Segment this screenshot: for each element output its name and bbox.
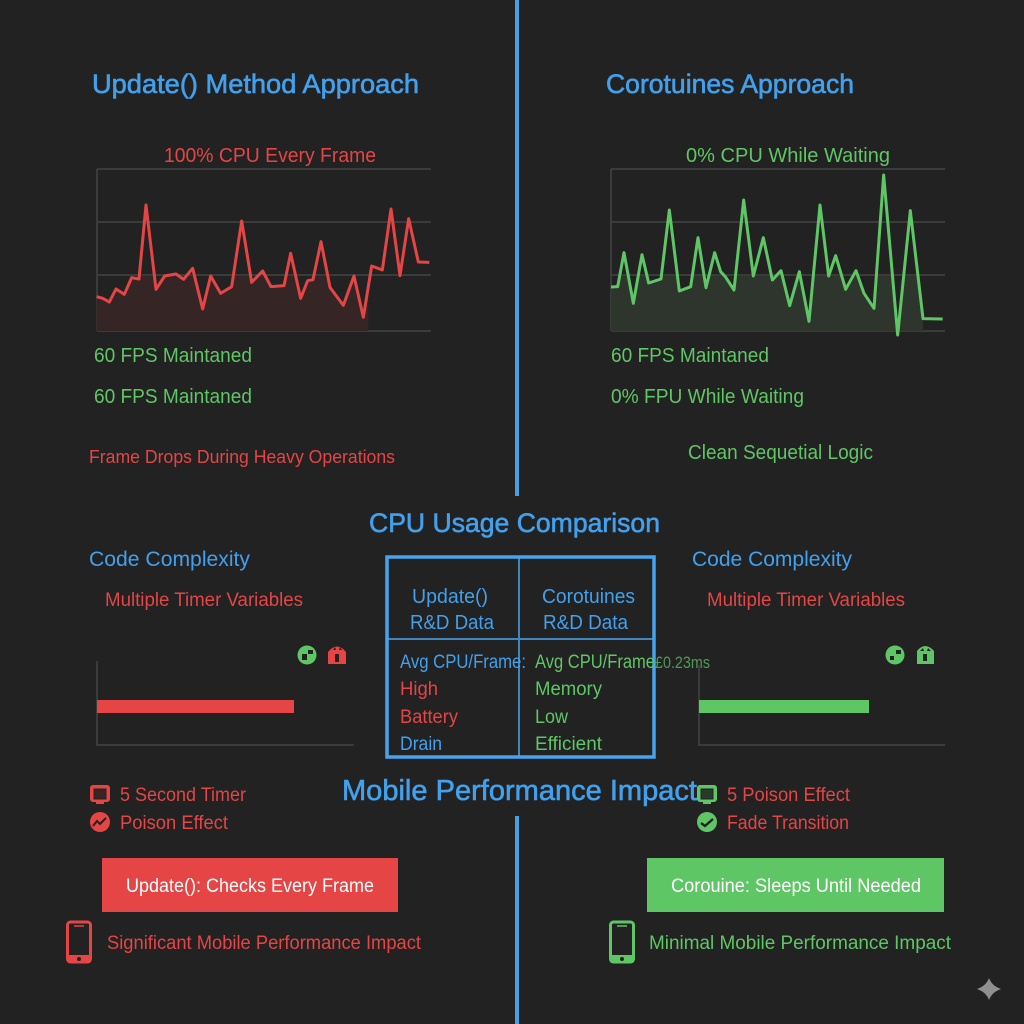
list item: poison: Poison Effect xyxy=(120,813,229,834)
note: clean logic: Clean Sequetial Logic xyxy=(688,442,873,464)
chart caption: update: 100% CPU Every Frame xyxy=(164,145,376,167)
list item: timer: 5 Second Timer xyxy=(120,785,247,806)
subheading: timer variables: Multiple Timer Variables xyxy=(105,590,303,611)
button: coroutine sleeps: Corouine: Sleeps Until Needed xyxy=(671,876,921,897)
column values: update: Drain xyxy=(400,734,442,755)
button: update checks: Update(): Checks Every Frame xyxy=(126,876,374,897)
column values: coroutines: Low xyxy=(535,707,568,728)
column header: coroutines xyxy=(542,586,635,634)
column values: update: Battery xyxy=(400,707,458,728)
column values: update xyxy=(400,652,526,755)
chart caption: coroutines: 0% CPU While Waiting xyxy=(686,145,890,167)
bar chart: coroutines complexity xyxy=(699,665,945,745)
heading: code complexity: Code Complexity xyxy=(89,548,250,571)
button: coroutine sleeps xyxy=(647,858,944,912)
list item: poison effect: 5 Poison Effect xyxy=(727,785,851,806)
subheading: timer variables: Multiple Timer Variables xyxy=(707,590,905,611)
stat: fpu while waiting: 0% FPU While Waiting xyxy=(611,386,804,408)
panel: code complexity update xyxy=(89,548,354,834)
icon: green lock xyxy=(917,646,934,664)
button: update checks xyxy=(102,858,398,912)
panel: update mobile impact xyxy=(67,858,422,963)
table grid xyxy=(387,557,654,757)
icon: green badge xyxy=(298,646,316,664)
icon: red lock xyxy=(328,646,346,664)
panel: comparison table xyxy=(387,557,710,757)
icon: green badge xyxy=(886,646,904,664)
panel: code complexity coroutines xyxy=(692,548,945,834)
panel: coroutines approach xyxy=(606,69,945,464)
text: minimal impact: Minimal Mobile Performance Impact xyxy=(649,933,952,954)
bar chart: update complexity xyxy=(97,661,354,745)
table border xyxy=(387,557,654,757)
line chart: update CPU xyxy=(97,169,431,331)
stat: fps: 60 FPS Maintaned xyxy=(94,345,252,367)
center divider bottom xyxy=(515,816,519,1024)
center divider top xyxy=(515,0,519,496)
column header: update xyxy=(410,586,495,634)
heading: code complexity: Code Complexity xyxy=(692,548,852,571)
heading: cpu usage comparison: CPU Usage Comparison xyxy=(369,508,660,538)
text: significant impact: Significant Mobile Performance Impact xyxy=(107,933,422,954)
heading: update approach: Update() Method Approach xyxy=(92,69,419,99)
icon: sparkle xyxy=(977,978,1001,1000)
column values: coroutines xyxy=(535,652,710,755)
column values: update: Avg CPU/Frame: xyxy=(400,652,526,673)
column header: coroutines: R&D Data xyxy=(543,612,629,634)
column values: coroutines: Memory xyxy=(535,679,602,700)
stat: fps: 60 FPS Maintaned xyxy=(611,345,769,367)
column values: coroutines: £0.23ms xyxy=(655,653,710,672)
panel: coroutines mobile impact xyxy=(610,858,952,963)
column values: update: High xyxy=(400,679,438,700)
list item: fade transition: Fade Transition xyxy=(727,813,849,834)
column header: update: Update() xyxy=(412,586,488,608)
column header: coroutines: Corotuines xyxy=(542,586,635,608)
heading: coroutines approach: Corotuines Approach xyxy=(606,69,854,99)
panel: update method approach xyxy=(89,69,431,467)
column header: update: R&D Data xyxy=(410,612,495,634)
icon: phone red xyxy=(67,922,91,963)
stat: fps repeat: 60 FPS Maintaned xyxy=(94,386,252,408)
column values: coroutines: Avg CPU/Frame xyxy=(535,652,655,673)
note: frame drops: Frame Drops During Heavy Operations xyxy=(89,447,395,467)
icon: phone green xyxy=(610,922,634,963)
column values: coroutines: Efficient xyxy=(535,734,603,755)
heading: mobile performance impact: Mobile Performance Impact xyxy=(342,775,697,807)
line chart: coroutines CPU xyxy=(611,169,945,335)
